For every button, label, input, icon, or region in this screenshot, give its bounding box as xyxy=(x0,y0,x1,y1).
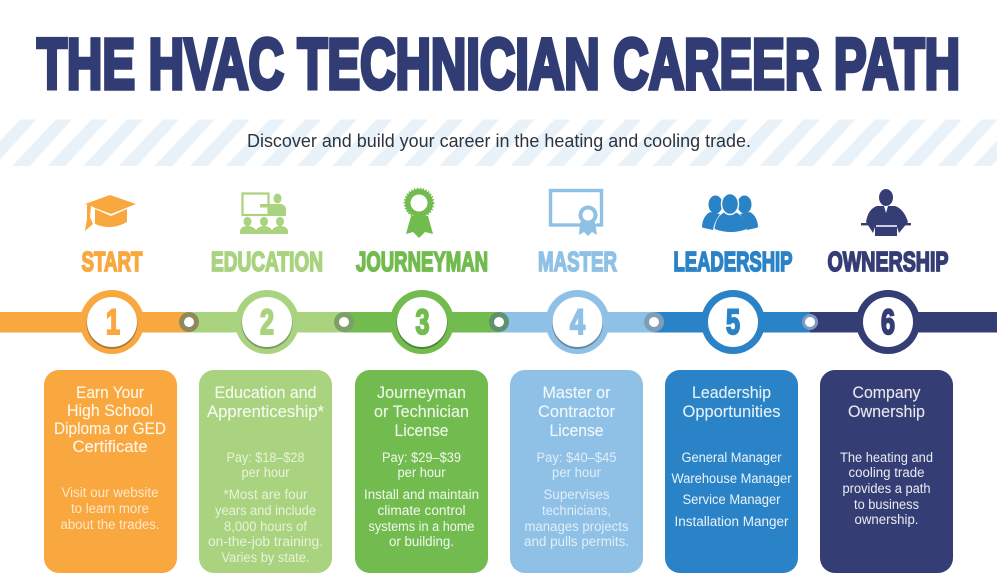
body: master panel xyxy=(524,450,629,549)
body: journeyman panel: per hour xyxy=(398,465,446,480)
step 1 marker: 1 xyxy=(106,303,120,342)
label: ownership: OWNERSHIP xyxy=(828,246,948,277)
connector dots xyxy=(179,312,818,332)
panel: education xyxy=(199,370,332,573)
body: master panel: Pay: $40–$45 xyxy=(536,450,616,465)
heading: start panel: High School xyxy=(67,402,153,420)
body: leadership panel: Warehouse Manager xyxy=(672,471,792,486)
step 3 marker xyxy=(390,290,454,354)
heading: leadership panel: Leadership xyxy=(692,384,771,402)
heading: master panel: Master or xyxy=(542,384,611,402)
body: education panel: years and include xyxy=(215,503,316,518)
heading: start panel: Diploma or GED xyxy=(54,420,166,438)
label: start: START xyxy=(82,246,143,277)
heading: education panel xyxy=(207,384,325,421)
step 2 marker xyxy=(235,290,299,354)
label: master: MASTER xyxy=(538,246,617,277)
body: journeyman panel: Install and maintain xyxy=(364,487,479,502)
heading: start panel: Certificate xyxy=(72,438,148,456)
body: journeyman panel: or building. xyxy=(389,534,454,549)
step 3 marker: 3 xyxy=(416,303,430,342)
body: leadership panel: General Manager xyxy=(682,450,782,465)
step 6 marker: 6 xyxy=(881,303,895,342)
panel: start xyxy=(44,370,177,573)
step 5 marker: 5 xyxy=(726,303,740,342)
body: journeyman panel: climate control xyxy=(378,503,466,518)
panel: ownership xyxy=(820,370,953,573)
icon: business owner xyxy=(861,189,911,236)
heading: ownership panel: Company xyxy=(852,384,921,402)
body: ownership panel: ownership. xyxy=(854,512,918,527)
step 2 marker: 2 xyxy=(260,303,274,342)
heading: education panel: Apprenticeship* xyxy=(207,403,325,421)
body: journeyman panel xyxy=(364,450,479,549)
icon: award ribbon xyxy=(404,188,434,238)
body: education panel xyxy=(208,450,323,565)
body: master panel: and pulls permits. xyxy=(524,534,629,549)
body: leadership panel: Service Manager xyxy=(682,492,781,507)
subtitle: Discover and build your career in the heating and cooling trade. xyxy=(247,131,751,151)
heading: ownership panel: Ownership xyxy=(848,403,925,421)
heading: education panel: Education and xyxy=(214,384,316,402)
body: journeyman panel: systems in a home xyxy=(368,519,474,534)
step labels xyxy=(82,246,948,277)
body: master panel: Supervises xyxy=(544,487,610,502)
heading: leadership panel xyxy=(682,384,780,421)
heading: leadership panel: Opportunities xyxy=(682,403,780,421)
body: leadership panel: Installation Manger xyxy=(674,514,789,529)
body: education panel: Varies by state. xyxy=(222,550,310,565)
heading: start panel: Earn Your xyxy=(76,384,144,402)
heading: master panel: License xyxy=(550,422,604,440)
body: leadership panel xyxy=(672,450,792,529)
body: ownership panel: provides a path xyxy=(842,481,930,496)
step 4 marker: 4 xyxy=(570,303,585,342)
striped subtitle band xyxy=(0,120,997,166)
body: master panel: technicians, xyxy=(542,503,611,518)
timeline ribbon xyxy=(0,312,997,332)
label: education: EDUCATION xyxy=(211,246,323,277)
heading: journeyman panel: or Technician xyxy=(374,403,469,421)
body: education panel: 8,000 hours of xyxy=(224,519,307,534)
body: ownership panel: The heating and xyxy=(840,450,933,465)
panel: journeyman xyxy=(355,370,488,573)
heading: journeyman panel: Journeyman xyxy=(377,384,466,402)
body: ownership panel: to business xyxy=(854,497,919,512)
heading: master panel xyxy=(538,384,616,440)
body: start panel: to learn more xyxy=(71,501,149,516)
body: master panel: manages projects xyxy=(524,519,629,534)
icon: classroom xyxy=(240,194,288,234)
step 5 marker xyxy=(701,290,765,354)
heading: start panel xyxy=(54,384,166,456)
body: start panel: about the trades. xyxy=(60,517,160,532)
body: ownership panel xyxy=(840,450,933,527)
body: start panel xyxy=(60,485,160,532)
icon: certificate xyxy=(550,190,602,236)
body: master panel: per hour xyxy=(552,465,601,480)
panel: leadership xyxy=(665,370,798,573)
body: ownership panel: cooling trade xyxy=(848,465,924,480)
heading: journeyman panel: License xyxy=(394,422,448,440)
body: education panel: *Most are four xyxy=(224,487,308,502)
body: journeyman panel: Pay: $29–$39 xyxy=(382,450,461,465)
panel: master xyxy=(510,370,643,573)
body: education panel: per hour xyxy=(242,465,290,480)
step 6 marker xyxy=(856,290,920,354)
heading: journeyman panel xyxy=(374,384,469,440)
body: start panel: Visit our website xyxy=(62,485,158,500)
label: journeyman: JOURNEYMAN xyxy=(356,246,488,277)
body: education panel: Pay: $18–$28 xyxy=(226,450,304,465)
heading: master panel: Contractor xyxy=(538,403,616,421)
icon: team of three xyxy=(702,194,758,232)
step 4 marker xyxy=(546,290,610,354)
icon: graduation cap xyxy=(85,195,136,231)
heading: ownership panel xyxy=(848,384,925,421)
step 1 marker xyxy=(80,290,144,354)
body: education panel: on-the-job training. xyxy=(208,534,323,549)
label: leadership: LEADERSHIP xyxy=(674,246,792,277)
